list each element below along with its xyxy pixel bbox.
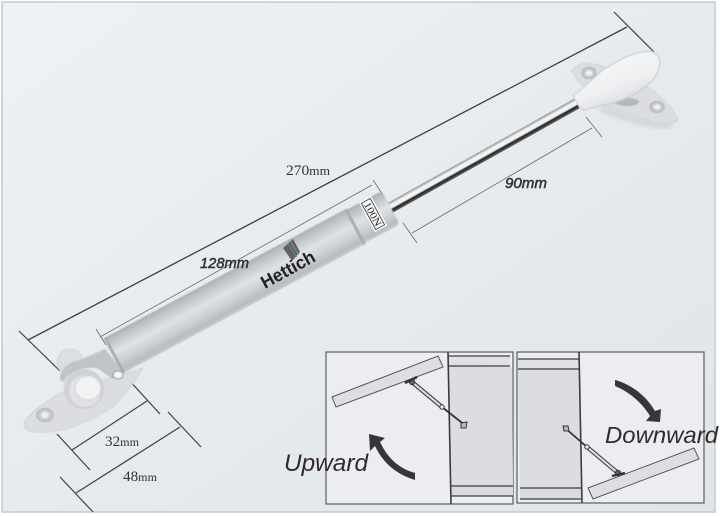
label: 100N force sticker [359,196,387,232]
label: 270mm: 270mm [286,163,330,179]
label: 100N force sticker: 100N [361,200,383,229]
flap board [588,448,699,499]
dimension: 48mm [60,412,201,512]
flap board [332,356,443,407]
label: 32mm: 32mm [105,434,140,450]
bracket arm [60,349,122,382]
right mounting bracket [572,63,678,127]
label: Downward: Downward [605,422,719,448]
label: 48mm: 48mm [123,469,158,485]
cabinet side [518,352,582,503]
brand name: Hettich: Hettich [257,247,319,293]
gas cylinder [104,190,400,374]
arrow: downward [615,380,661,422]
strut [405,377,467,428]
usage panel: upward opening [326,352,513,504]
back of pivot [57,349,83,375]
arrow: upward [369,434,415,480]
mounting plate [24,368,143,432]
dimension: 32mm [57,379,160,470]
left mounting bracket [24,349,143,432]
cabinet side [448,352,513,504]
brand logo mark [283,239,300,261]
label: 128mm: 128mm [200,256,249,272]
pivot button [64,369,104,409]
dimension: 270mm overall length [19,12,654,371]
dimension: 128mm cylinder length [96,180,383,345]
label: Upward: Upward [284,450,369,477]
label: 90mm: 90mm [505,176,547,192]
piston rod [386,99,579,214]
end cap [573,51,660,110]
dimension: 90mm rod length [403,117,602,243]
usage panel: downward closing [517,352,704,503]
strut [563,426,625,476]
